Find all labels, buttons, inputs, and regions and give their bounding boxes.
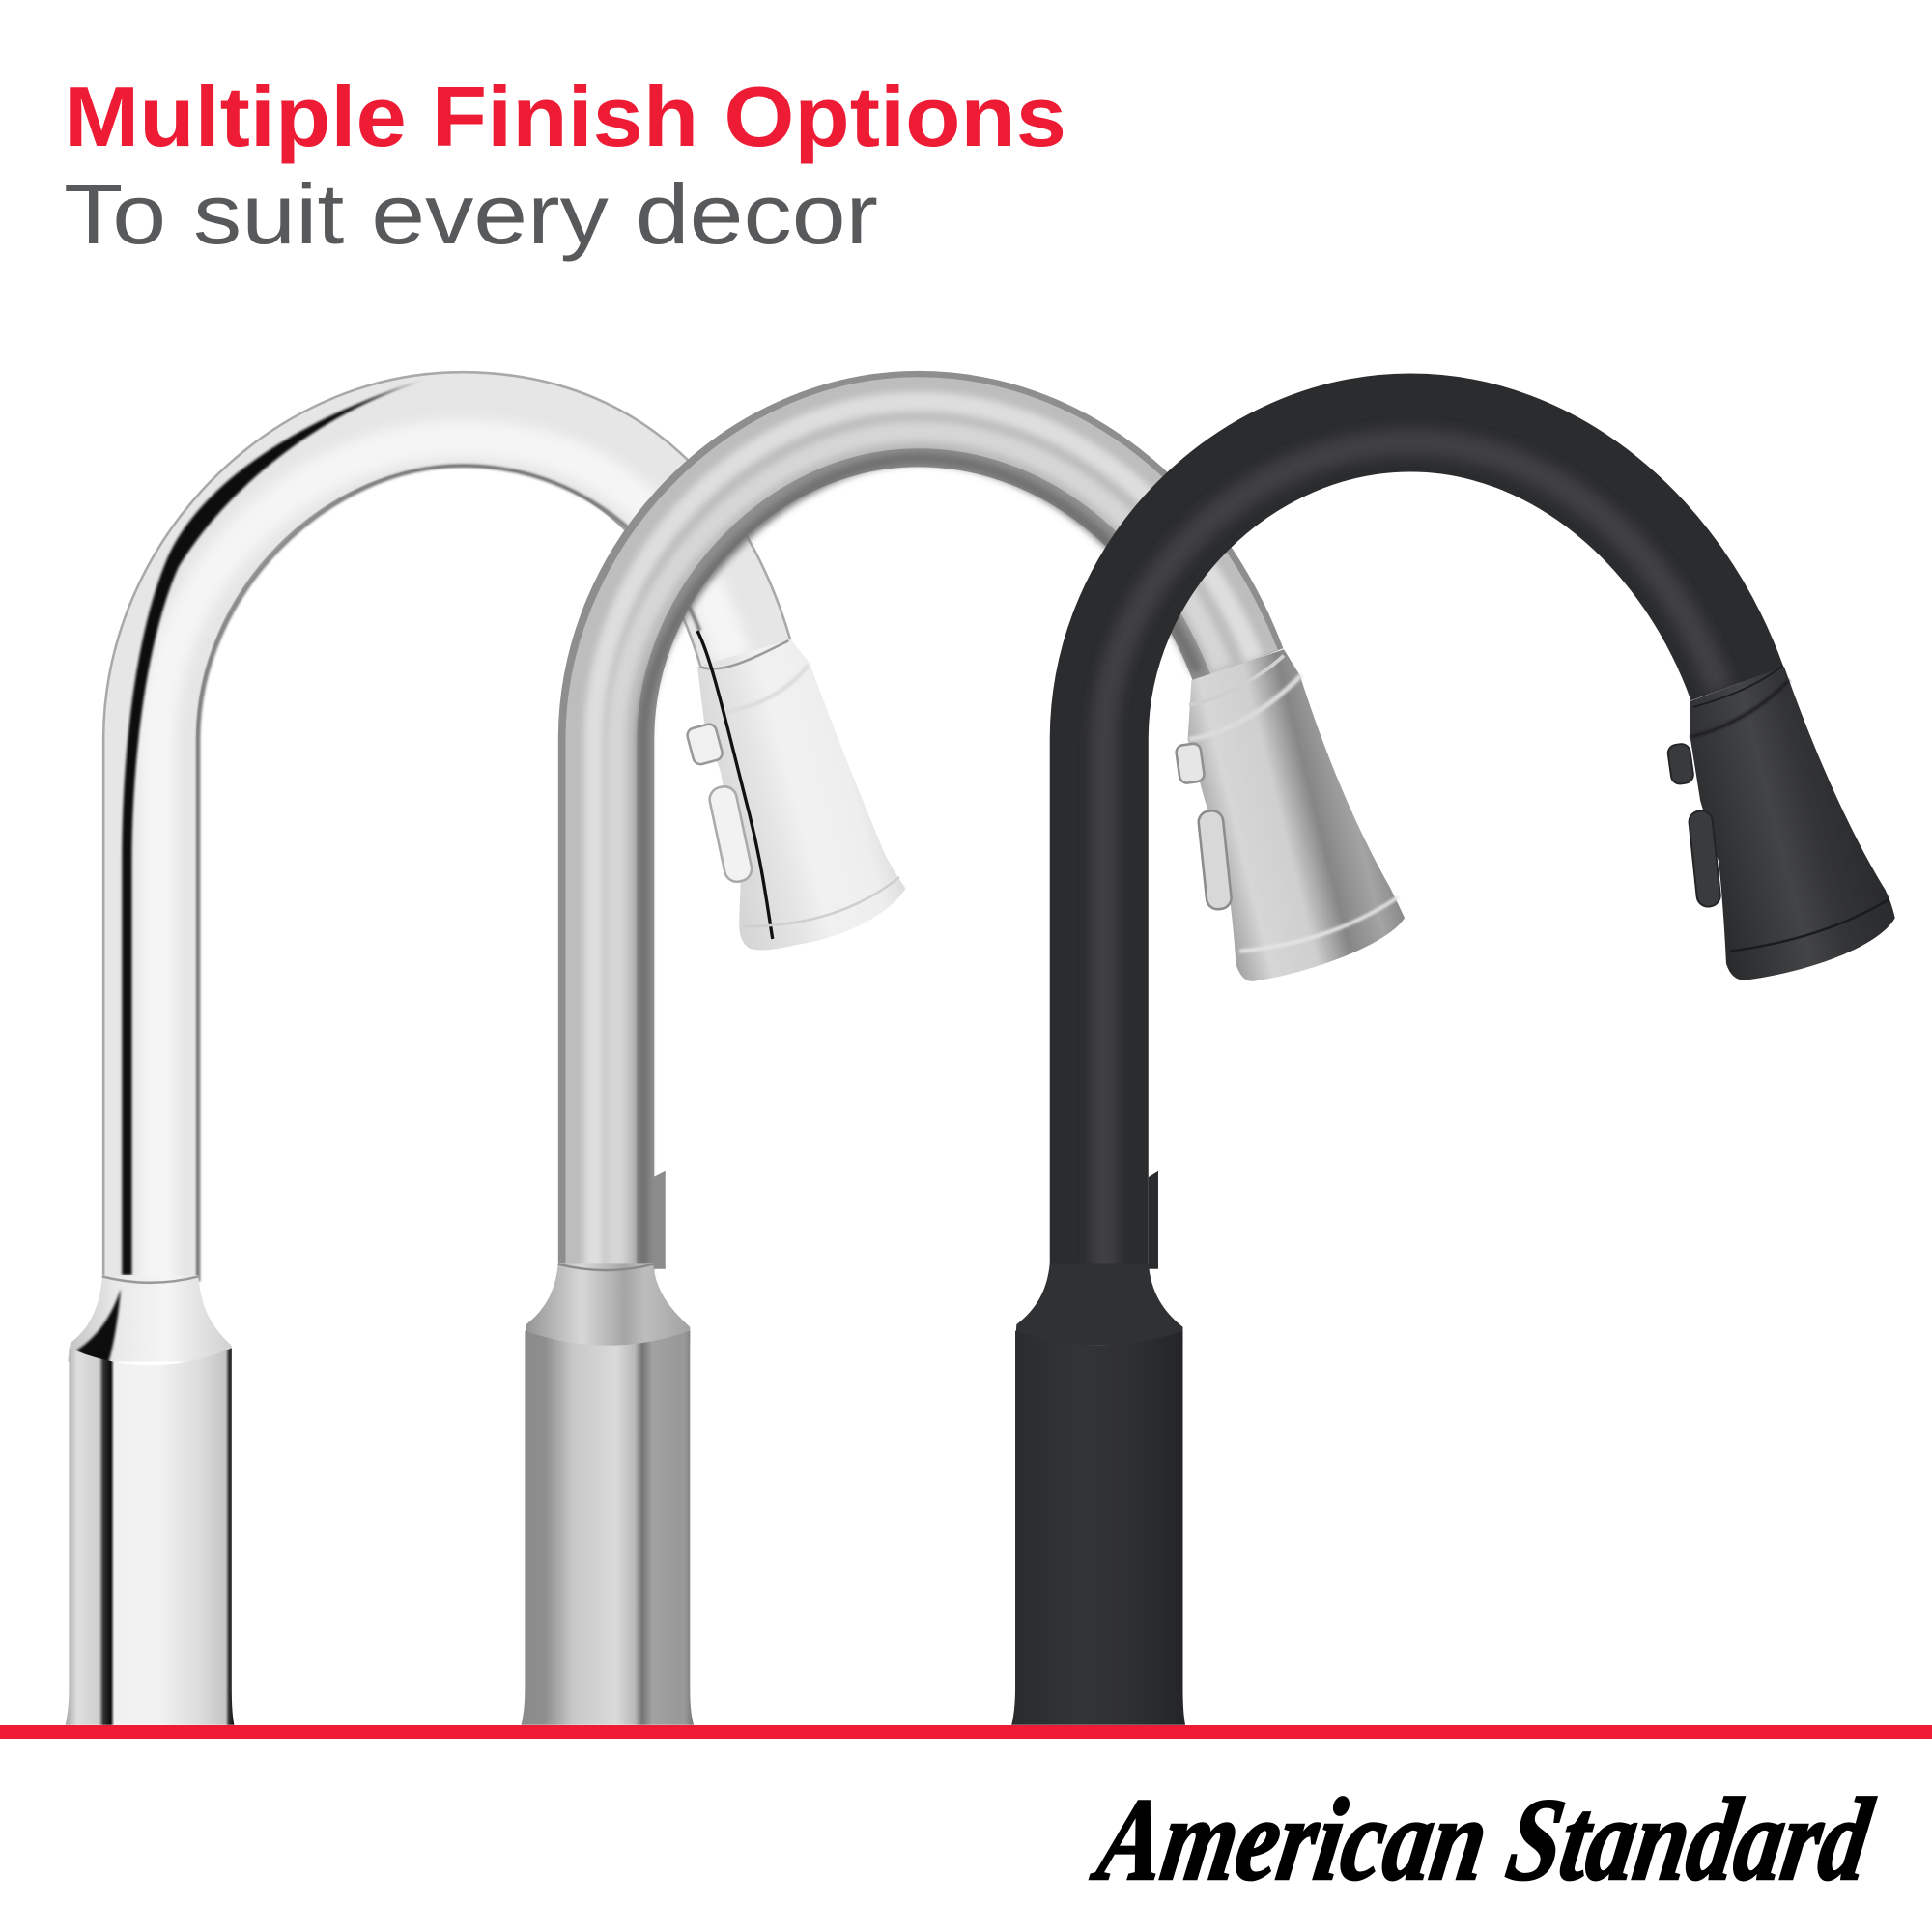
heading <box>64 69 1066 262</box>
brushed base <box>522 1331 694 1725</box>
brushed ring <box>558 1264 653 1270</box>
chrome head streak <box>697 631 773 939</box>
chrome spout <box>151 419 746 1288</box>
brushed spray head <box>1188 649 1405 981</box>
chrome head seam <box>699 640 788 668</box>
chrome collar <box>68 1275 232 1361</box>
brushed head seam <box>1189 656 1284 705</box>
chrome reflection streak <box>122 380 425 1275</box>
black tab <box>1149 1171 1158 1269</box>
chrome lower button <box>707 784 753 884</box>
black upper button <box>1667 743 1694 785</box>
brushed upper button <box>1176 743 1205 784</box>
chrome collar reflection <box>76 1289 121 1370</box>
chrome base <box>66 1348 234 1725</box>
subtitle: To suit every decor: To suit every decor <box>64 166 878 262</box>
brushed spout <box>594 402 1254 1282</box>
black head shoulder <box>1690 680 1789 737</box>
faucets <box>66 380 1895 1725</box>
faucet: matte black finish <box>1011 422 1895 1725</box>
faucet: brushed nickel finish <box>522 402 1405 1725</box>
chrome head rim <box>743 877 899 926</box>
brushed lower button <box>1198 810 1233 910</box>
brushed tab <box>653 1171 666 1269</box>
brushed head rim <box>1239 897 1399 952</box>
black head seam <box>1693 666 1783 707</box>
chrome head shoulder <box>724 666 809 712</box>
brushed collar <box>525 1263 690 1346</box>
red divider bar <box>0 1725 1932 1739</box>
chrome upper button <box>686 723 724 766</box>
brushed head shoulder <box>1189 675 1301 739</box>
black collar <box>1015 1263 1182 1346</box>
faucet: chrome finish <box>66 380 905 1725</box>
black lower button <box>1688 810 1721 908</box>
black head rim <box>1730 899 1889 952</box>
black spout <box>1099 422 1737 1282</box>
black base <box>1011 1331 1185 1725</box>
chrome spray head <box>697 639 905 950</box>
chrome ring <box>102 1276 198 1283</box>
black spray head <box>1690 667 1895 980</box>
title: Multiple Finish Options: Multiple Finish Options <box>64 69 1066 164</box>
